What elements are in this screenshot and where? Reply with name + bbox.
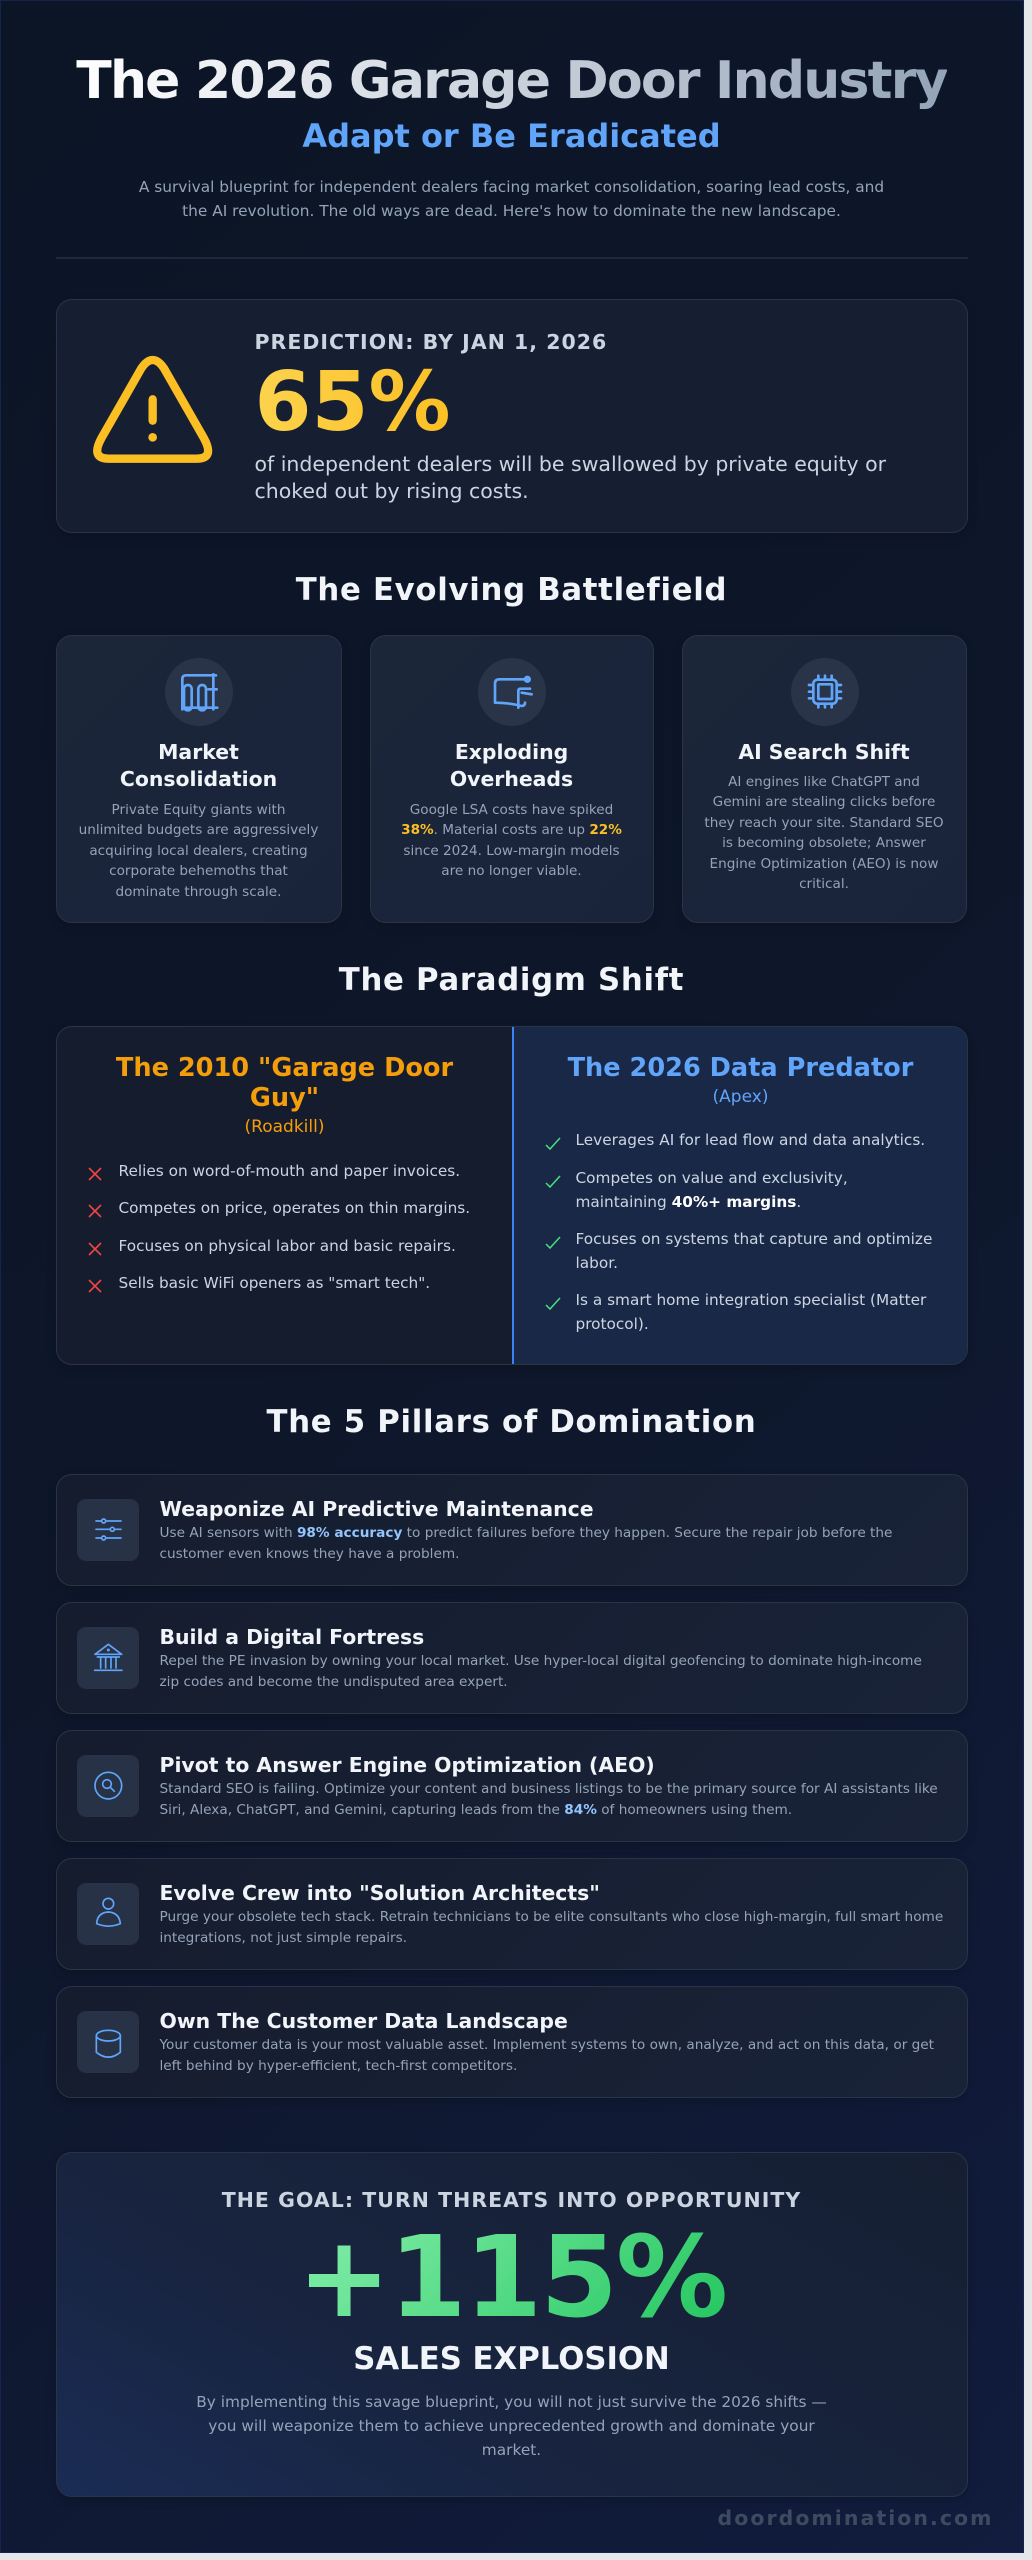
goal text: you will weaponize them to achieve unprecedented growth and dominate your xyxy=(208,2416,815,2434)
intro text: A survival blueprint for independent dealers facing market consolidation, soaring lead costs, and xyxy=(139,178,884,196)
list item: Relies on word-of-mouth and paper invoices. xyxy=(118,1162,460,1180)
card text: unlimited budgets are aggressively xyxy=(79,822,318,838)
card text: since 2024. Low-margin models xyxy=(403,842,620,858)
list item: Competes on price, operates on thin margins. xyxy=(118,1199,470,1217)
card text xyxy=(401,802,622,879)
prediction label: PREDICTION: BY JAN 1, 2026 xyxy=(254,330,607,354)
list item xyxy=(546,1291,926,1333)
pillar text: integrations, not just simple repairs. xyxy=(160,1930,407,1946)
goal text xyxy=(196,2392,827,2458)
card title: Consolidation xyxy=(120,767,277,791)
pillar text xyxy=(160,1653,922,1690)
card text: Private Equity giants with xyxy=(112,802,285,818)
sales explosion: SALES EXPLOSION xyxy=(353,2341,670,2377)
pillar title: Build a Digital Fortress xyxy=(160,1624,424,1648)
intro text xyxy=(139,178,884,220)
pillar title: Pivot to Answer Engine Optimization (AEO) xyxy=(160,1752,655,1776)
card text: are no longer viable. xyxy=(441,863,582,879)
list item xyxy=(546,1169,848,1211)
card text: dominate through scale. xyxy=(115,884,282,900)
icon: market consolidation xyxy=(164,658,232,726)
pillar text: Purge your obsolete tech stack. Retrain technicians to be elite consultants who close high-margin, full smart home xyxy=(160,1909,943,1925)
list item: Focuses on physical labor and basic repairs. xyxy=(118,1236,456,1254)
card text: Gemini are stealing clicks before xyxy=(713,794,935,810)
list item: Leverages AI for lead flow and data analytics. xyxy=(576,1131,925,1149)
icon: bank xyxy=(76,1626,138,1688)
pillar text: Your customer data is your most valuable asset. Implement systems to own, analyze, and act on this data, or get xyxy=(160,2037,934,2053)
card text xyxy=(704,774,944,892)
panel: pillar 5 xyxy=(56,1986,968,2098)
card text: is becoming obsolete; Answer xyxy=(722,835,926,851)
panel: AI search shift xyxy=(682,634,966,922)
panel: pillar 4 xyxy=(56,1858,968,1970)
card text: they reach your site. Standard SEO xyxy=(704,814,944,830)
list item: Focuses on systems that capture and optimize xyxy=(576,1230,932,1248)
icon: sliders xyxy=(76,1498,138,1560)
card text: corporate behemoths that xyxy=(109,863,288,879)
panel: exploding overheads xyxy=(370,634,654,922)
card text: Google LSA costs have spiked xyxy=(410,802,613,818)
icon: search circle xyxy=(76,1754,138,1816)
icon: person xyxy=(76,1882,138,1944)
panel: pillar 3 xyxy=(56,1730,968,1842)
list item: Is a smart home integration specialist (Matter xyxy=(576,1291,926,1309)
panel: market consolidation xyxy=(56,634,342,922)
prediction text: of independent dealers will be swallowed by private equity or xyxy=(254,452,886,476)
goal text: market. xyxy=(482,2440,541,2458)
column subtitle: apex: (Apex) xyxy=(713,1086,768,1106)
stat: +115%: +115% xyxy=(297,2212,726,2342)
list item: protocol). xyxy=(576,1315,649,1333)
pillar text: Standard SEO is failing. Optimize your content and business listings to be the primary source for AI assistants like xyxy=(160,1781,938,1797)
goal text: By implementing this savage blueprint, you will not just survive the 2026 shifts — xyxy=(196,2392,827,2410)
icon: database xyxy=(76,2010,138,2072)
panel: pillar 1 xyxy=(56,1474,968,1586)
icon: overheads xyxy=(478,658,546,726)
card title: Overheads xyxy=(450,767,573,791)
panel: prediction xyxy=(56,298,968,532)
pillar text: Repel the PE invasion by owning your local market. Use hyper-local digital geofencing to dominate high-income xyxy=(160,1653,922,1669)
card title xyxy=(450,740,573,791)
column title: 2010: The 2010 "Garage Door xyxy=(116,1052,453,1082)
card text xyxy=(79,802,318,900)
goal label: THE GOAL: TURN THREATS INTO OPPORTUNITY xyxy=(222,2188,801,2212)
icon: chip xyxy=(790,658,858,726)
stat: 65%: 65% xyxy=(254,354,451,450)
pillar text xyxy=(160,1909,943,1946)
column title: 2026: The 2026 Data Predator xyxy=(568,1052,913,1082)
panel: pillar 2 xyxy=(56,1602,968,1714)
prediction text xyxy=(254,452,886,502)
card title: AI Search Shift xyxy=(738,740,910,764)
footer url: doordomination.com xyxy=(718,2506,994,2530)
pillar title: Own The Customer Data Landscape xyxy=(160,2008,568,2032)
pillar title: Weaponize AI Predictive Maintenance xyxy=(160,1496,594,1520)
pillar text xyxy=(160,2037,934,2074)
list item: labor. xyxy=(576,1254,618,1272)
list item xyxy=(546,1230,932,1272)
card text: 38%. Material costs are up 22% xyxy=(401,822,622,838)
card text: acquiring local dealers, creating xyxy=(89,842,308,858)
pillar text: Siri, Alexa, ChatGPT, and Gemini, capturing leads from the 84% of homeowners using them. xyxy=(160,1802,792,1818)
subtitle: Adapt or Be Eradicated xyxy=(302,116,721,154)
column: 2026 data predator background xyxy=(512,1026,968,1366)
card text: AI engines like ChatGPT and xyxy=(728,774,920,790)
list item: Competes on value and exclusivity, xyxy=(576,1169,848,1187)
list item: maintaining 40%+ margins. xyxy=(576,1193,801,1211)
pillar text xyxy=(160,1781,938,1818)
column title: 2010: Guy" xyxy=(250,1082,319,1112)
pillar text: left behind by hyper-efficient, tech-first competitors. xyxy=(160,2058,517,2074)
prediction text: choked out by rising costs. xyxy=(254,478,529,502)
intro text: the AI revolution. The old ways are dead. Here's how to dominate the new landscape. xyxy=(182,202,841,220)
list item: Sells basic WiFi openers as "smart tech". xyxy=(118,1274,430,1292)
pillar text: zip codes and become the undisputed area expert. xyxy=(160,1674,508,1690)
pillar text: Use AI sensors with 98% accuracy to predict failures before they happen. Secure the repair job before the xyxy=(160,1525,892,1541)
icon: warning triangle xyxy=(93,356,212,463)
heading: pillars: The 5 Pillars of Domination xyxy=(267,1404,756,1440)
heading: paradigm shift: The Paradigm Shift xyxy=(339,962,684,998)
column title: 2010 xyxy=(116,1052,454,1112)
pillar text xyxy=(160,1525,892,1562)
column subtitle: roadkill: (Roadkill) xyxy=(245,1116,324,1136)
card title xyxy=(120,740,277,791)
pillar text: customer even knows they have a problem. xyxy=(160,1546,459,1562)
title: The 2026 Garage Door Industry xyxy=(76,50,947,110)
card text: Engine Optimization (AEO) is now xyxy=(710,856,938,872)
pillar title: Evolve Crew into "Solution Architects" xyxy=(160,1880,600,1904)
panel: comparison xyxy=(56,1026,968,1364)
heading: battlefield: The Evolving Battlefield xyxy=(296,572,727,608)
panel: goal xyxy=(56,2152,968,2496)
card title: Market xyxy=(158,740,239,764)
card text: critical. xyxy=(799,876,849,892)
card title: Exploding xyxy=(455,740,568,764)
